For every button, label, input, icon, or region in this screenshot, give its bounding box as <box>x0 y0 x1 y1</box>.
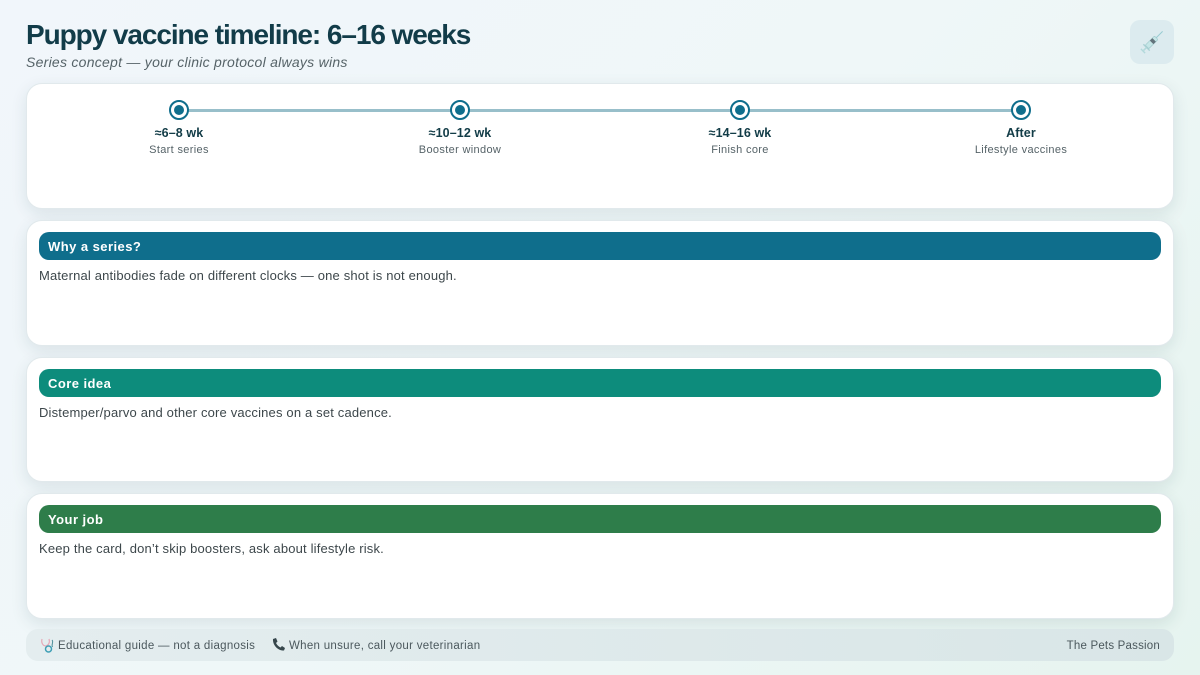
subtitle: Series concept — your clinic protocol always wins <box>26 54 348 70</box>
timeline sublabel 4: Lifestyle vaccines <box>975 144 1067 156</box>
footer bar <box>26 629 1174 661</box>
heading: your job <box>39 505 1161 533</box>
timeline label 2: ≈10–12 wk <box>429 126 491 140</box>
text: your job: Keep the card, don’t skip boosters, ask about lifestyle risk. <box>39 541 384 556</box>
timeline node 2 <box>450 100 470 120</box>
timeline node 4 <box>1011 100 1031 120</box>
heading: why a series: Why a series? <box>48 239 141 254</box>
panel: why a series <box>26 220 1174 346</box>
footer note: call your veterinarian: When unsure, call your veterinarian <box>289 640 480 652</box>
timeline sublabel 3: Finish core <box>711 144 769 156</box>
footer brand: The Pets Passion <box>1067 640 1160 652</box>
heading: core idea <box>39 369 1161 397</box>
text: why a series: Maternal antibodies fade on different clocks — one shot is not enough. <box>39 268 457 283</box>
panel: core idea <box>26 357 1174 482</box>
icon: syringe badge <box>1130 20 1174 64</box>
icon: stethoscope <box>41 638 54 653</box>
heading: core idea: Core idea <box>48 376 111 391</box>
timeline sublabel 1: Start series <box>149 144 209 156</box>
panel: timeline <box>26 83 1174 209</box>
panel: your job <box>26 493 1174 619</box>
timeline node 3 <box>730 100 750 120</box>
timeline line <box>179 109 1021 112</box>
timeline label 1: ≈6–8 wk <box>155 126 203 140</box>
timeline label 4: After <box>1006 126 1036 140</box>
timeline label 3: ≈14–16 wk <box>709 126 771 140</box>
timeline node 1 <box>169 100 189 120</box>
heading: why a series <box>39 232 1161 260</box>
timeline sublabel 2: Booster window <box>419 144 501 156</box>
footer note: educational guide: Educational guide — not a diagnosis <box>58 640 255 652</box>
title: Puppy vaccine timeline: 6–16 weeks <box>26 19 470 50</box>
text: core idea: Distemper/parvo and other core vaccines on a set cadence. <box>39 405 392 420</box>
heading: your job: Your job <box>48 512 103 527</box>
icon: phone <box>273 638 285 650</box>
